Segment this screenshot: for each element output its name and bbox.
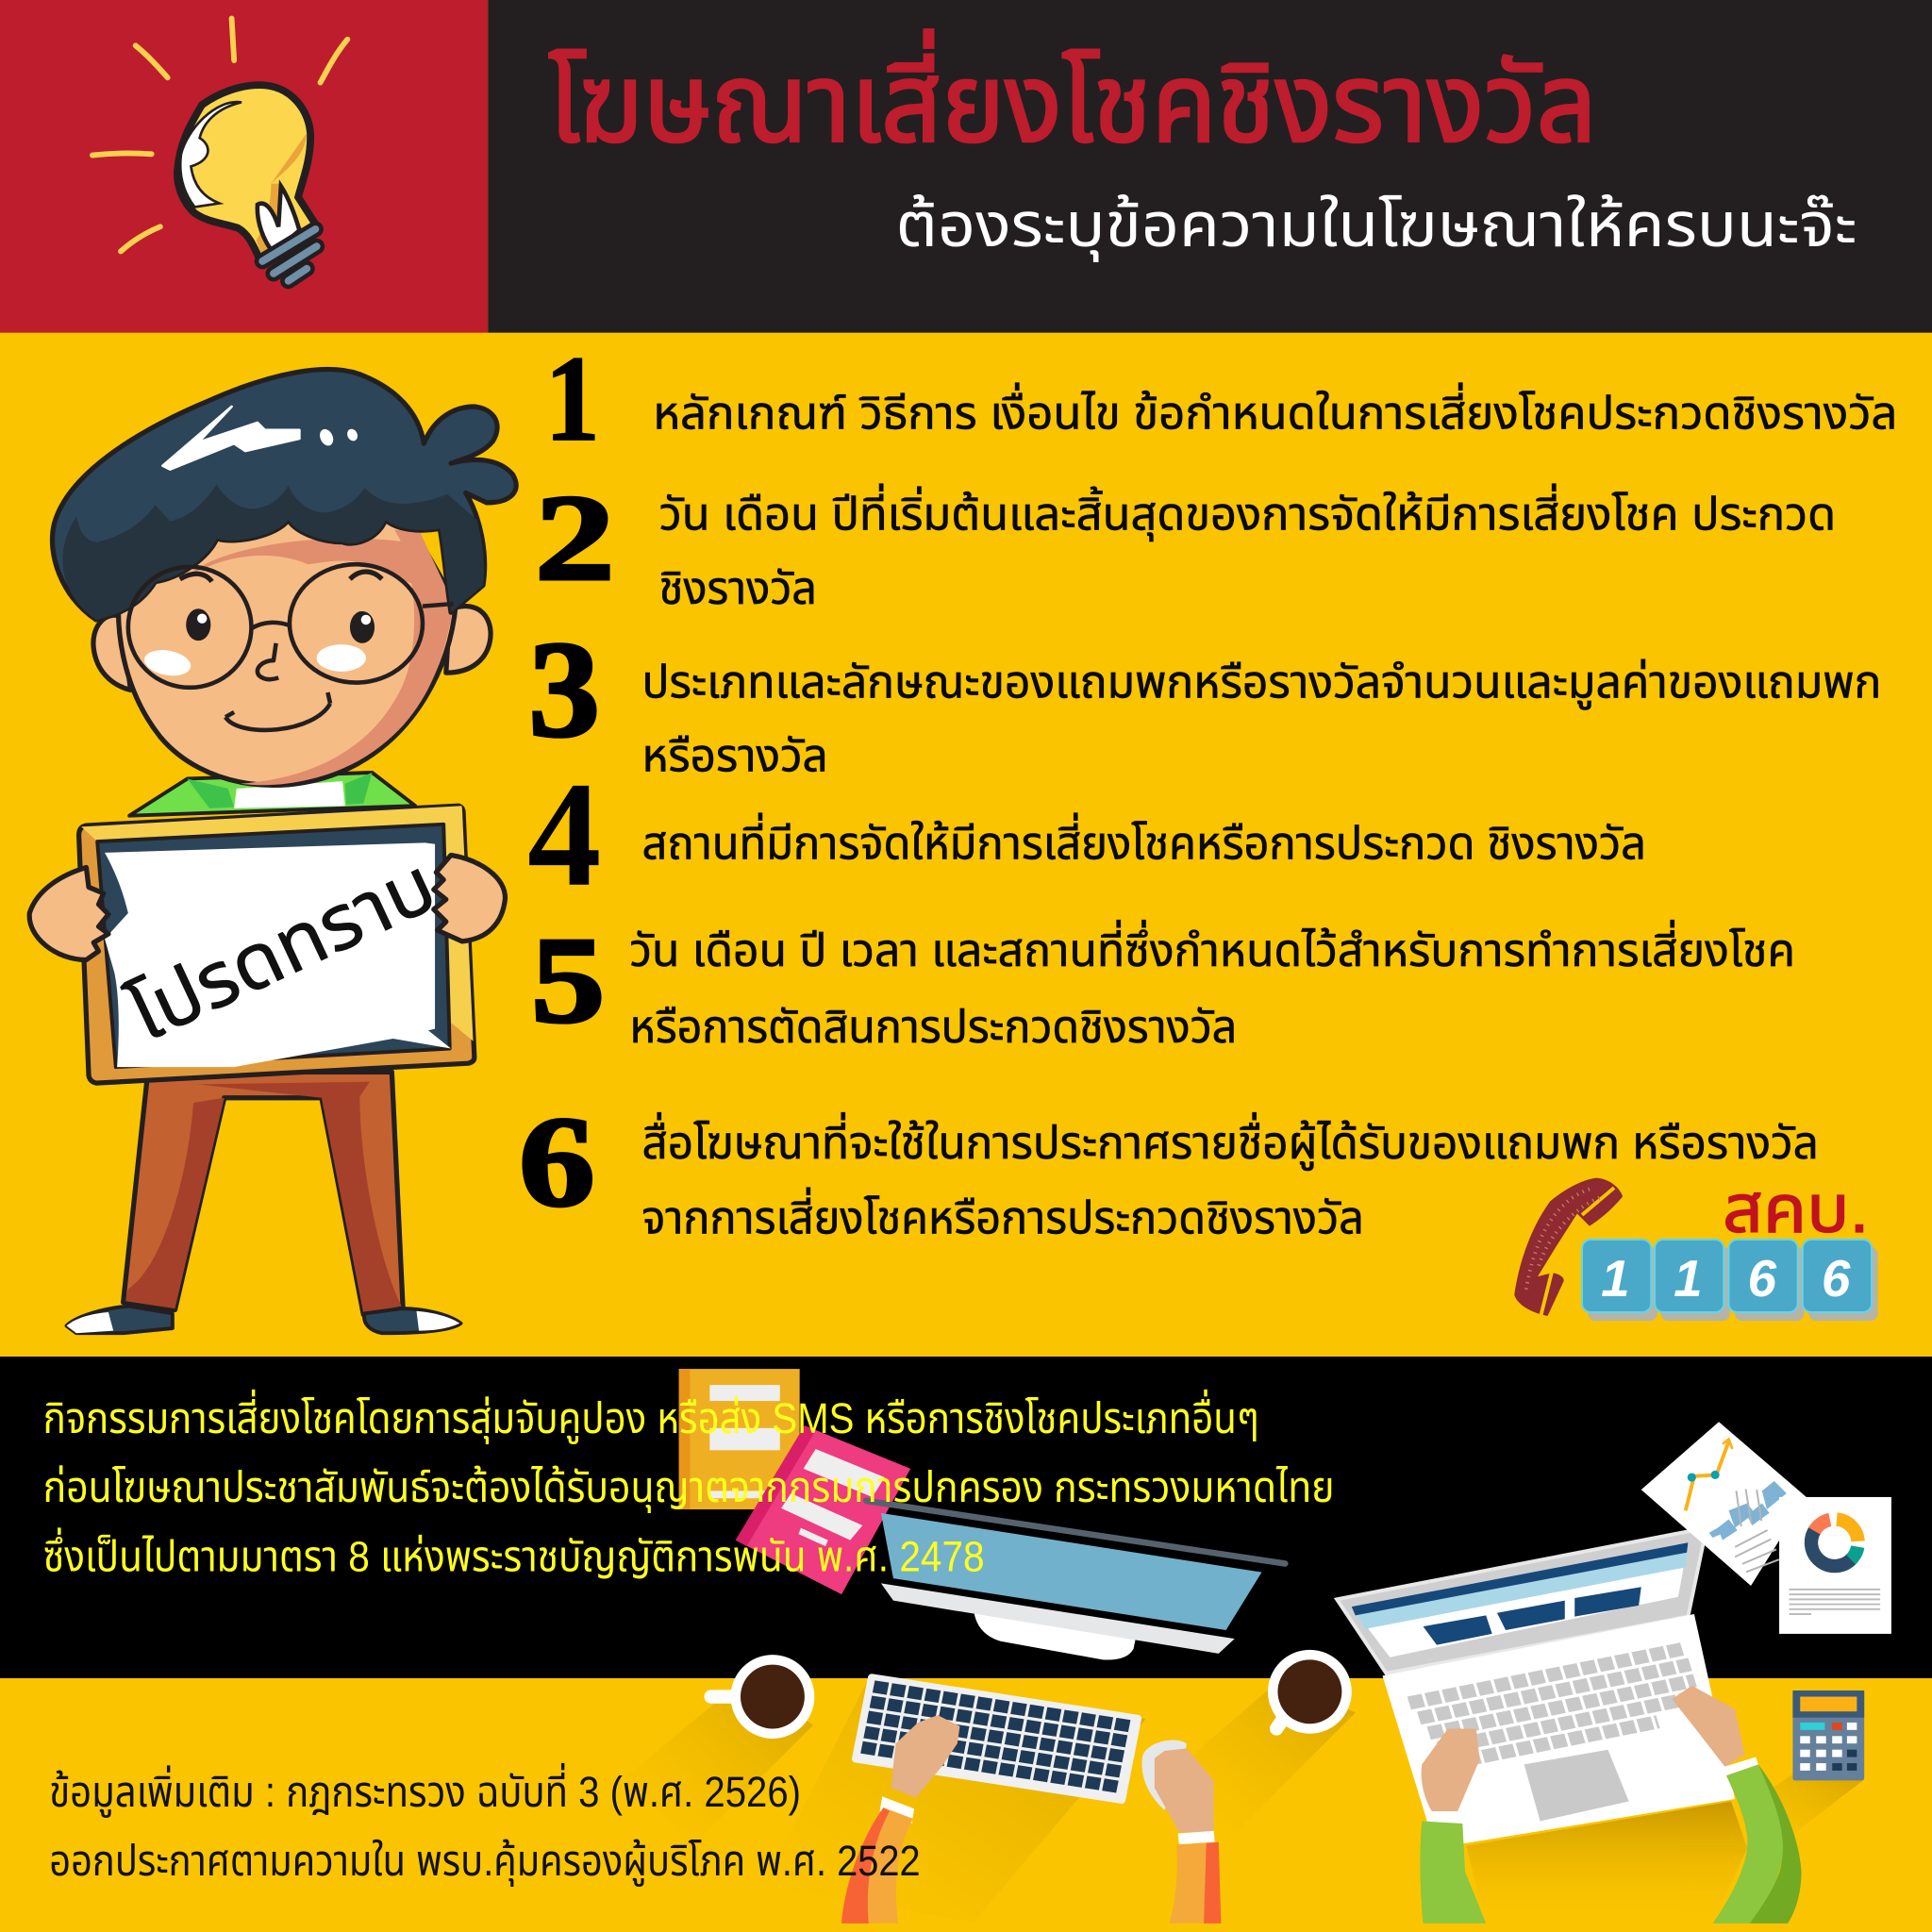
footer references: ออกประกาศตามความใน พรบ.คุ้มครองผู้บริโภค พ.ศ. 2522 bbox=[49, 1837, 921, 1887]
item 2: วัน เดือน ปีที่เริ่มต้นและสิ้นสุดของการจัดให้มีการเสี่ยงโชค ประกวด bbox=[659, 484, 1836, 542]
keys: 1166: 6 bbox=[1747, 1249, 1776, 1307]
icon: pink book bbox=[736, 1425, 910, 1594]
title: โฆษณาเสี่ยงโชคชิงรางวัล bbox=[548, 29, 1597, 165]
item 5: หรือการตัดสินการประกวดชิงรางวัล bbox=[629, 1002, 1237, 1053]
item 3: 3 bbox=[528, 613, 600, 766]
hands bbox=[29, 855, 506, 959]
item 2 bbox=[535, 471, 1836, 614]
keys: 1166: 1 bbox=[1674, 1249, 1703, 1307]
item 5: วัน เดือน ปี เวลา และสถานที่ซึ่งกำหนดไว้สำหรับการทำการเสี่ยงโชค bbox=[629, 920, 1795, 976]
item 3: ประเภทและลักษณะของแถมพกหรือรางวัลจำนวนและมูลค่าของแถมพก bbox=[641, 657, 1881, 709]
item 6: สื่อโฆษณาที่จะใช้ในการประกาศรายชื่อผู้ได้รับของแถมพก หรือรางวัล bbox=[641, 1112, 1819, 1171]
icon: chart paper bbox=[1641, 1422, 1807, 1586]
item 4 bbox=[527, 752, 1646, 918]
hotline badge bbox=[1514, 1172, 1878, 1321]
icon: laptop bbox=[1337, 1528, 1735, 1848]
item 2: ชิงรางวัล bbox=[659, 563, 817, 614]
item 6: จากการเสี่ยงโชคหรือการประกวดชิงรางวัล bbox=[641, 1187, 1364, 1243]
item 3 bbox=[528, 613, 1881, 782]
keys: 1166 bbox=[1582, 1240, 1878, 1321]
item 1: 1 bbox=[544, 331, 600, 467]
panel: dark title block bbox=[488, 0, 1932, 333]
frame bbox=[79, 806, 475, 1083]
icon: orange book bbox=[679, 1369, 800, 1509]
character: boy holding sign bbox=[29, 370, 516, 1333]
keys: 1166: 6 bbox=[1822, 1249, 1851, 1307]
sign text: โปรดทราบ bbox=[117, 842, 448, 1058]
icon: keyboard bbox=[851, 1674, 1142, 1805]
legs bbox=[124, 1072, 403, 1315]
notice text bbox=[43, 1389, 1335, 1580]
item 4: 4 bbox=[527, 752, 601, 918]
notice text: ซึ่งเป็นไปตามมาตรา 8 แห่งพระราชบัญญัติการพนัน พ.ศ. 2478 bbox=[43, 1526, 985, 1580]
sign paper bbox=[105, 842, 451, 1067]
header panel bbox=[0, 0, 1932, 333]
shirt bbox=[129, 773, 415, 816]
item 4: สถานที่มีการจัดให้มีการเสี่ยงโชคหรือการประกวด ชิงรางวัล bbox=[641, 812, 1646, 869]
footer references bbox=[49, 1762, 921, 1887]
icon: mouse and hand bbox=[1141, 1740, 1221, 1924]
item 3: หรือรางวัล bbox=[641, 731, 828, 782]
subtitle: ต้องระบุข้อความในโฆษณาให้ครบนะจ๊ะ bbox=[896, 191, 1857, 262]
icon: coffee cup left bbox=[711, 1655, 814, 1739]
notice text: ก่อนโฆษณาประชาสัมพันธ์จะต้องได้รับอนุญาตจากกรมการปกครอง กระทรวงมหาดไทย bbox=[43, 1463, 1335, 1513]
label: agency: สคบ. bbox=[1723, 1172, 1869, 1246]
notice text: กิจกรรมการเสี่ยงโชคโดยการสุ่มจับคูปอง หรือส่ง SMS หรือการชิงโชคประเภทอื่นๆ bbox=[43, 1389, 1259, 1444]
illustration: desk items bbox=[679, 1369, 1891, 1924]
item 6 bbox=[519, 1090, 1819, 1243]
footer references: ข้อมูลเพิ่มเติม : กฎกระทรวง ฉบับที่ 3 (พ.ศ. 2526) bbox=[49, 1762, 801, 1818]
hair bbox=[52, 370, 516, 620]
icon: donut report bbox=[1779, 1497, 1891, 1634]
icon: light bulb bbox=[92, 19, 347, 281]
glasses and eyes bbox=[128, 564, 454, 730]
icon: hands and sleeves on laptop bbox=[1420, 1686, 1802, 1924]
icon: telephone bbox=[1514, 1178, 1623, 1319]
icon: desktop monitor bbox=[866, 1501, 1285, 1659]
numbered list bbox=[519, 331, 1897, 1243]
shoes bbox=[67, 1306, 460, 1333]
item 5: 5 bbox=[531, 913, 605, 1049]
item 1 bbox=[544, 331, 1897, 467]
item 1: หลักเกณฑ์ วิธีการ เงื่อนไข ข้อกำหนดในการเสี่ยงโชคประกวดชิงรางวัล bbox=[653, 383, 1897, 440]
bottom panel shadows bbox=[628, 1678, 1863, 1924]
ears bbox=[93, 607, 491, 690]
icon: coffee cup right bbox=[1268, 1650, 1352, 1734]
item 2: 2 bbox=[535, 471, 615, 607]
panel: red icon block bbox=[0, 0, 488, 333]
item 5 bbox=[531, 913, 1795, 1053]
icon: hand on keyboard bbox=[841, 1715, 959, 1924]
face bbox=[119, 518, 456, 785]
keys: 1166: 1 bbox=[1601, 1249, 1630, 1307]
panel: black notice band bbox=[0, 1357, 1932, 1678]
icon: calculator bbox=[1792, 1690, 1864, 1780]
item 6: 6 bbox=[519, 1090, 595, 1233]
